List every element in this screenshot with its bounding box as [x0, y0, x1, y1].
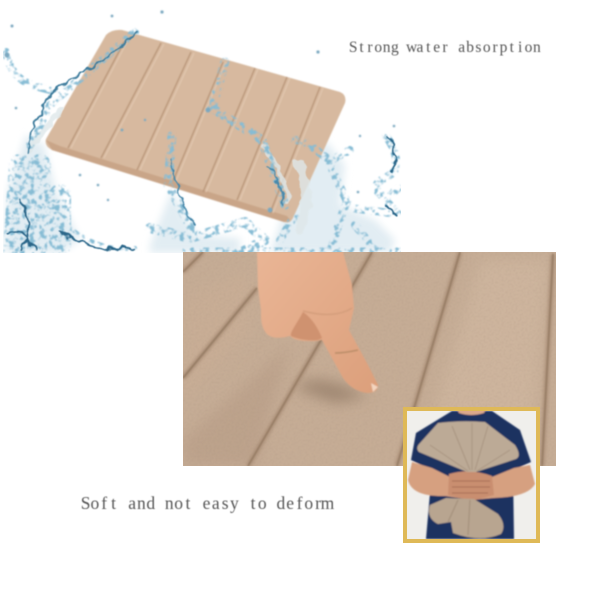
arms and hands: [408, 462, 535, 500]
splash: mottled blue water texture: [6, 32, 400, 253]
mat surface: [182, 252, 557, 467]
folded mat upper fan: [417, 421, 519, 472]
droplets: small scattered water drops: [4, 10, 395, 212]
folded mat lower fan: [429, 498, 503, 538]
navy t-shirt: [411, 411, 531, 539]
caption: water absorption: Strong water absorption: [349, 39, 541, 56]
splash: pale foam over the mat: [32, 106, 310, 204]
man holding folded mat: [408, 407, 535, 539]
gold frame: [405, 409, 538, 541]
caption: softness: Soft and not easy to deform: [81, 493, 335, 513]
hand with pointing finger: [257, 252, 378, 393]
mat fur texture: [183, 252, 556, 466]
panel: water splash photo: [4, 10, 400, 253]
panel: close-up photo of finger pressing mat: [182, 252, 557, 467]
panel: inset photo of man folding the mat: [405, 407, 538, 541]
mat shading and ribs: [183, 252, 553, 466]
inset background: [405, 409, 538, 541]
splash: soft pale water behind the mat: [4, 135, 395, 253]
splash: darker water streaks: [8, 32, 398, 250]
mat: tan striped bath mat: [46, 30, 345, 222]
neck: [456, 411, 486, 416]
